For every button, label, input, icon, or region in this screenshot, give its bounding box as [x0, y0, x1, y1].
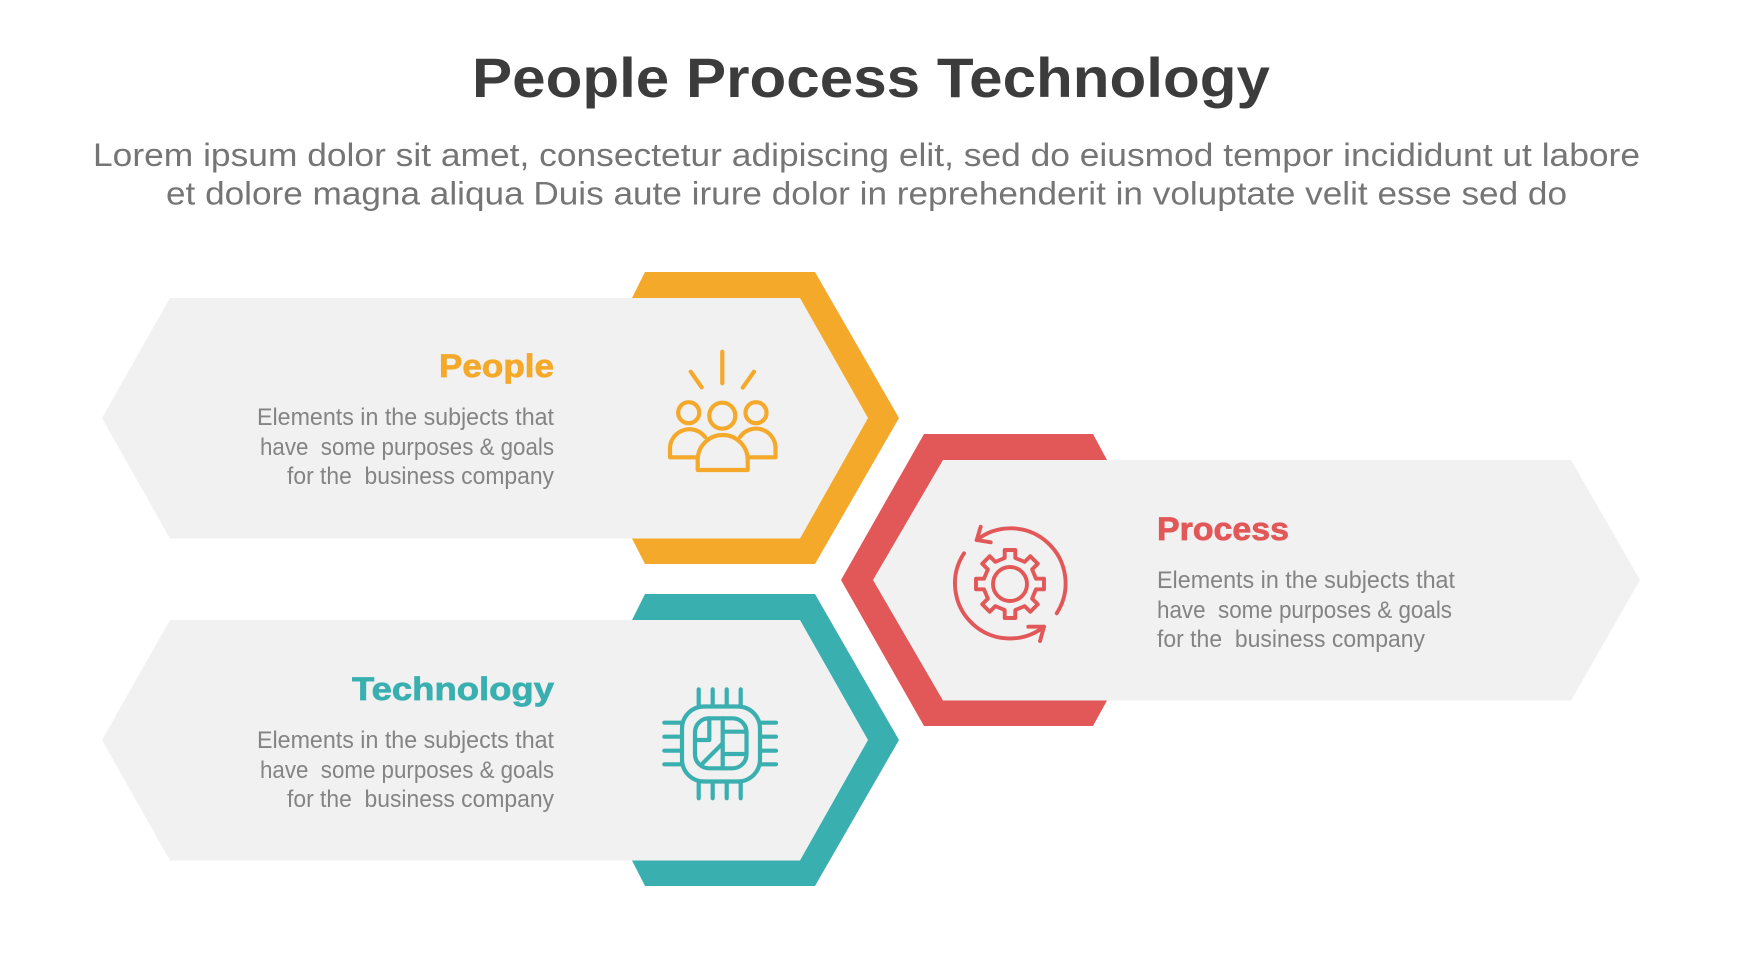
process grey arrow body — [873, 460, 1640, 700]
people description — [257, 404, 554, 490]
process description: have some purposes & goals — [1157, 597, 1452, 624]
people heading: People — [439, 348, 554, 384]
process description: for the business company — [1157, 626, 1425, 653]
people description: Elements in the subjects that — [257, 404, 554, 431]
panel: technology — [102, 594, 899, 886]
process red hexagon band — [841, 434, 1107, 726]
people grey arrow body — [102, 298, 868, 538]
technology grey arrow body — [102, 620, 868, 860]
technology description: for the business company — [287, 786, 554, 813]
technology description — [257, 727, 554, 813]
subtitle text block: et dolore magna aliqua Duis aute irure dolor in reprehenderit in voluptate velit esse sed do — [166, 176, 1567, 212]
icon: people group — [670, 352, 776, 470]
title: People Process Technology — [472, 46, 1270, 109]
process description — [1157, 567, 1455, 653]
technology description: Elements in the subjects that — [257, 727, 554, 754]
icon: microchip — [664, 689, 776, 798]
panel: process — [841, 434, 1640, 726]
technology description: have some purposes & goals — [260, 757, 554, 784]
icon: gear with cycle arrows — [955, 527, 1066, 641]
process description: Elements in the subjects that — [1157, 567, 1455, 594]
people description: for the business company — [287, 463, 554, 490]
technology teal hexagon band — [632, 594, 899, 886]
people description: have some purposes & goals — [260, 434, 554, 461]
technology heading: Technology — [352, 671, 554, 707]
subtitle text block: Lorem ipsum dolor sit amet, consectetur adipiscing elit, sed do eiusmod tempor incididunt ut labore — [93, 137, 1640, 173]
subtitle text block — [93, 137, 1640, 212]
people orange hexagon band — [632, 272, 899, 564]
panel: people — [102, 272, 899, 564]
process heading: Process — [1157, 511, 1289, 547]
